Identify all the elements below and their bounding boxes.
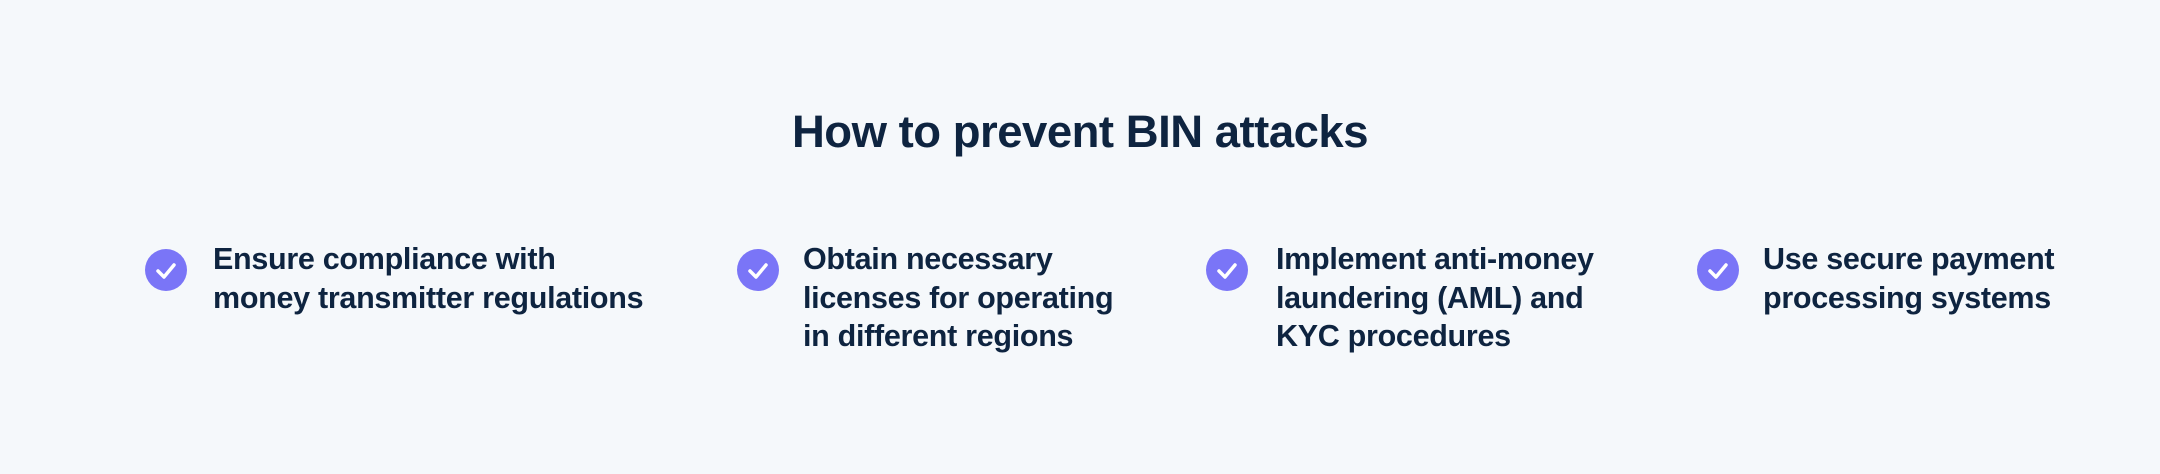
item 1: [145, 242, 643, 315]
icon: check: [1206, 249, 1248, 291]
item 2: [737, 242, 1113, 353]
text: [1276, 242, 1594, 353]
icon: check: [1697, 249, 1739, 291]
icon: check: [737, 249, 779, 291]
text: Use secure payment: [1763, 242, 2054, 276]
text: [213, 242, 643, 315]
text: [1763, 242, 2054, 315]
text: laundering (AML) and: [1276, 281, 1583, 315]
icon: check: [145, 249, 187, 291]
text: licenses for operating: [803, 281, 1113, 315]
text: Obtain necessary: [803, 242, 1052, 276]
item 4: [1697, 242, 2054, 315]
text: money transmitter regulations: [213, 281, 643, 315]
text: in different regions: [803, 319, 1073, 353]
text: [803, 242, 1113, 353]
title: How to prevent BIN attacks: [792, 106, 1368, 157]
item 3: [1206, 242, 1594, 353]
text: KYC procedures: [1276, 319, 1511, 353]
text: Ensure compliance with: [213, 242, 556, 276]
text: processing systems: [1763, 281, 2051, 315]
text: Implement anti-money: [1276, 242, 1594, 276]
